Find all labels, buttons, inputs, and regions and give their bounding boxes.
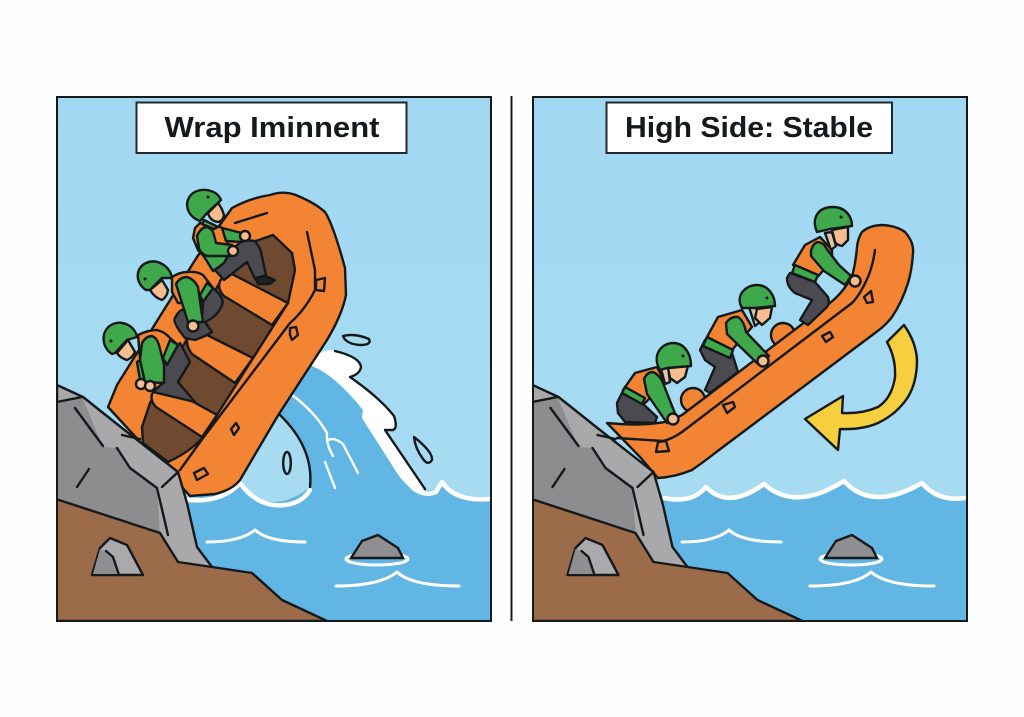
divider line: [510, 96, 512, 621]
sky pocket under raft: [240, 415, 310, 502]
raft: tipping: [108, 193, 346, 496]
thwarts: [219, 273, 288, 325]
sky background: [57, 97, 491, 621]
paddler: bottom: [617, 343, 691, 424]
river water: [662, 478, 966, 620]
paddler: top: [787, 207, 860, 325]
cliff and bank: [56, 385, 327, 621]
heading: high side stable: High Side: Stable: [625, 112, 873, 144]
rock in water: [346, 535, 408, 565]
raft lines and handles: [180, 213, 315, 470]
rock in water: [820, 535, 882, 565]
raft lines and handles: [617, 250, 875, 441]
raft: high side: [607, 225, 913, 478]
wave streaks: [292, 395, 358, 488]
water ripples: [682, 530, 934, 586]
heading: wrap imminent: [136, 102, 406, 153]
wave surface foam: [664, 481, 965, 500]
panel border: [533, 97, 967, 621]
rotation arrow: [805, 325, 917, 450]
cliff and bank: [532, 385, 802, 621]
thwart bumps: [681, 388, 705, 412]
paddler: middle: [700, 285, 775, 393]
panel border: [57, 97, 491, 621]
foam crest: [310, 350, 425, 492]
paddler: middle: [138, 261, 223, 340]
water droplets: [283, 335, 432, 474]
small rock on bank: [568, 538, 618, 575]
paddler: bottom: [104, 323, 195, 402]
heading: high side stable: [606, 102, 892, 153]
water ripples: [207, 530, 459, 586]
wave surface foam: [188, 482, 490, 505]
heading: wrap imminent: Wrap Iminnent: [164, 112, 380, 144]
sky background: [533, 97, 967, 621]
panel: high side stable: [532, 97, 967, 621]
small rock on bank: [92, 538, 143, 575]
paddler: top: [187, 190, 275, 284]
panel: wrap imminent: [56, 97, 491, 621]
river water and wave: [186, 334, 490, 620]
raft floor: [142, 235, 295, 462]
